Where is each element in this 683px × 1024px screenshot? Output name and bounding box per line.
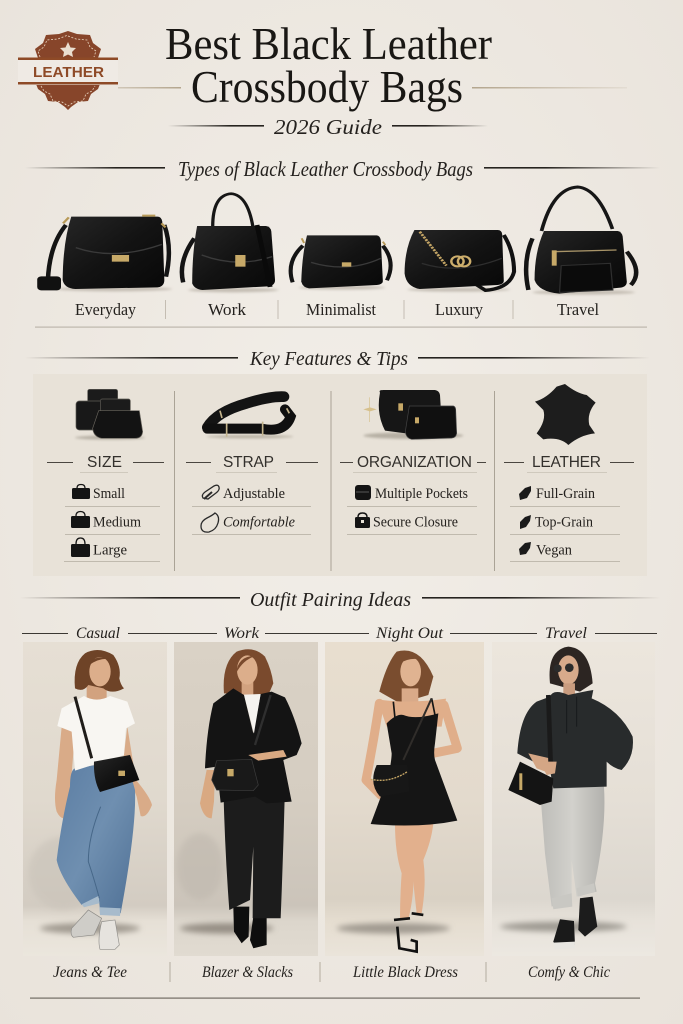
bag: travel [526,187,636,295]
figure: little black dress [337,651,457,952]
item: medium: Medium [93,514,141,530]
column: strap [186,397,318,534]
icon: organizer bags [363,390,463,439]
label: Everyday: Everyday [75,300,136,319]
item: comfortable: Comfortable [223,514,295,530]
heading: key features: Key Features & Tips [249,348,408,370]
badge: leather hide logo: LEATHER [33,64,104,81]
column: organization [340,390,486,534]
title: Crossbody Bags [191,61,463,112]
caption: little black dress: Little Black Dress [352,964,458,981]
item: vegan [510,542,620,562]
figure: comfy and chic [500,647,633,949]
item: multiple pockets [347,485,477,506]
panel: travel outfit [492,642,655,956]
icon: three nested bags [75,389,145,440]
bag: work [182,194,278,292]
heading: strap: STRAP [223,454,274,471]
heading: types of bags: Types of Black Leather Crossbody Bags [178,157,473,181]
heading: outfit pairing: Outfit Pairing Ideas [250,589,411,611]
item: secure closure: Secure Closure [373,514,458,530]
caption: jeans and tee: Jeans & Tee [53,964,127,981]
column: leather [504,384,634,562]
caption: comfy and chic: Comfy & Chic [528,964,610,981]
icon: black leather hide [535,384,596,445]
figure: blazer and slacks [177,649,302,948]
item: secure closure [347,513,477,534]
category: night out: Night Out [375,625,444,642]
item: large: Large [93,542,127,558]
heading: leather: LEATHER [532,454,601,471]
panel: night out outfit [325,642,484,956]
item: multiple pockets: Multiple Pockets [375,486,468,502]
bag: everyday [37,216,172,291]
bag: minimalist [291,235,391,290]
icon: belt strap [207,397,293,438]
item: medium [65,512,160,534]
panel: casual outfit [23,642,167,956]
column: size [47,389,164,562]
label: Work: Work [208,300,246,319]
heading: leather [504,454,634,472]
item: top-grain: Top-Grain [535,514,593,530]
label: Minimalist: Minimalist [306,300,376,319]
category: casual: Casual [76,625,121,642]
heading: size [47,454,164,472]
title [118,18,627,112]
title: Best Black Leather [165,18,492,69]
item: vegan: Vegan [536,542,572,558]
panel: work outfit [174,642,318,956]
item: full-grain: Full-Grain [536,486,595,502]
heading: size: SIZE [87,454,122,471]
captions: outfit names [53,962,610,982]
item: small: Small [93,486,125,502]
heading: organization: ORGANIZATION [357,454,472,471]
item: small [65,484,160,506]
bag: luxury [405,230,514,292]
subtitle: 2026 Guide: 2026 Guide [274,115,382,139]
figure: jeans and tee [28,650,152,949]
category: work: Work [224,625,260,642]
caption: blazer and slacks: Blazer & Slacks [202,964,293,981]
panel: bag types row [35,187,647,328]
badge: leather hide logo [18,31,118,110]
label: Travel: Travel [557,300,599,319]
label: Luxury: Luxury [435,300,483,319]
category: travel: Travel [545,625,588,642]
panel: key features [33,374,647,576]
item: large [64,538,160,562]
item: top-grain [510,514,620,534]
item: adjustable: Adjustable [223,486,285,502]
headings: outfit categories [22,625,657,642]
item: full-grain [510,486,620,506]
